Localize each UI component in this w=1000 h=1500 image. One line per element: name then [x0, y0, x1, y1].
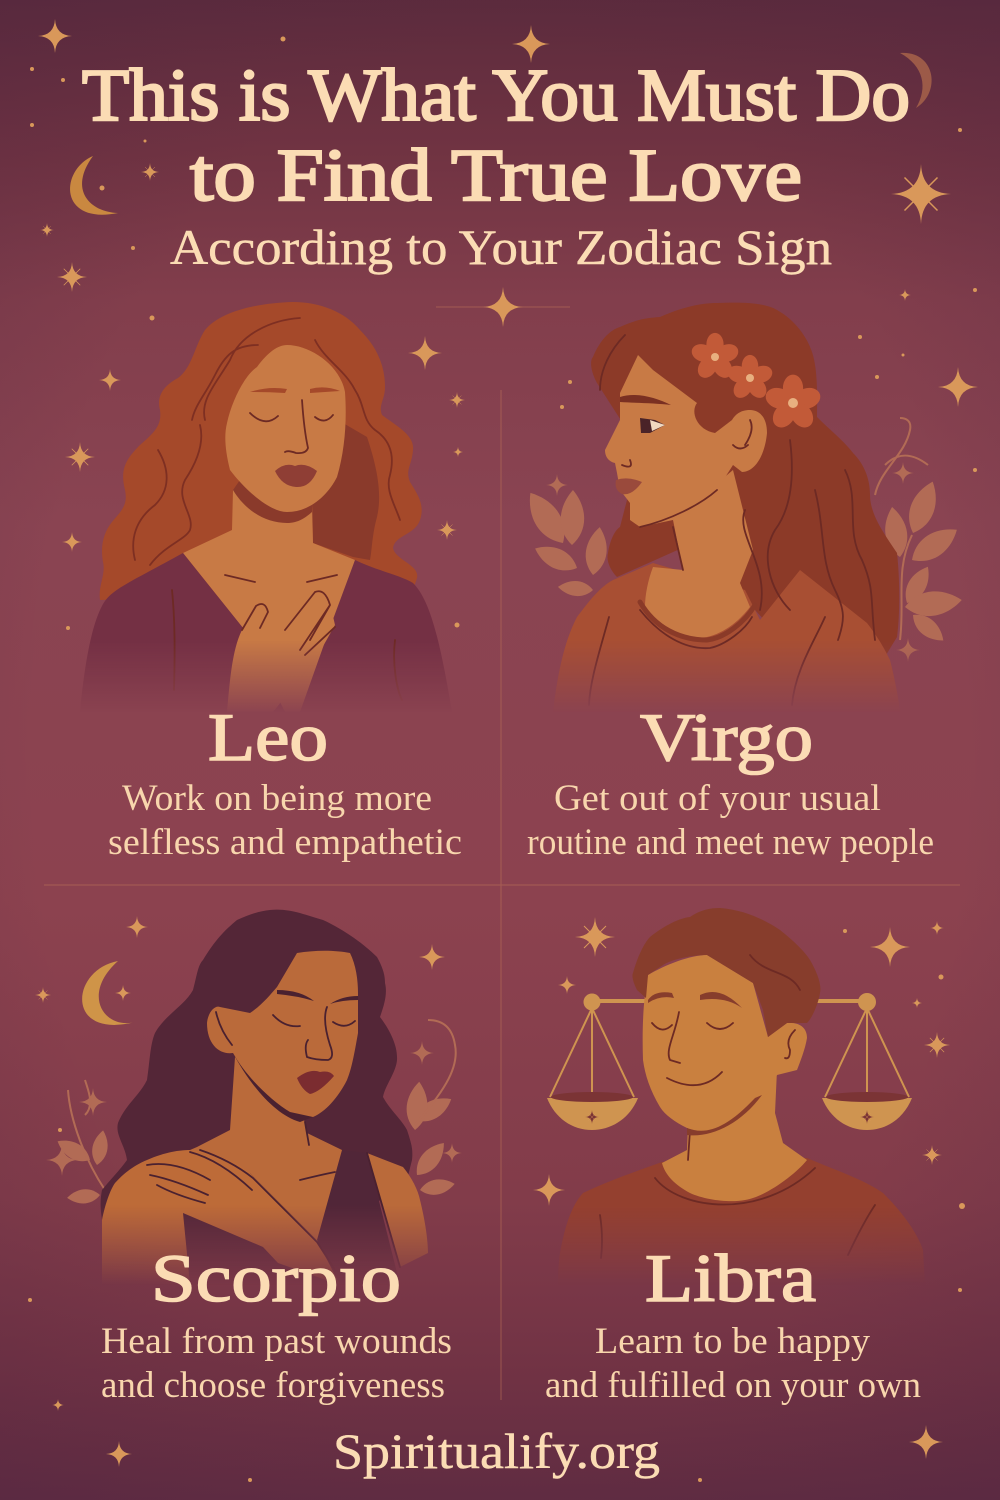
icon: crescent moon [82, 961, 135, 1025]
panel: Libra [545, 908, 925, 1406]
icon: crescent moon top right [900, 53, 932, 108]
text: Scorpio advice: and choose forgiveness [101, 1365, 445, 1406]
heading: Scorpio: Scorpio [151, 1240, 401, 1316]
panel: Scorpio [46, 910, 462, 1406]
text: Virgo advice: Get out of your usual [554, 778, 881, 819]
illustration: Libra man [558, 908, 925, 1285]
heading: Virgo: Virgo [640, 699, 813, 775]
text: Libra advice: Learn to be happy [595, 1321, 870, 1362]
text: Libra advice: and fulfilled on your own [545, 1365, 921, 1406]
panel: Virgo [520, 303, 963, 863]
footer: website: Spiritualify.org [333, 1423, 660, 1479]
title: to Find True Love [190, 135, 802, 217]
heading: Libra: Libra [645, 1240, 816, 1316]
text: Leo advice: selfless and empathetic [108, 822, 462, 863]
subtitle: According to Your Zodiac Sign [170, 219, 832, 275]
text: Libra advice [545, 1321, 921, 1406]
text: Leo advice: Work on being more [122, 778, 432, 819]
icon: crescent moon left [70, 156, 118, 215]
illustration: Leo woman [80, 302, 452, 712]
text: Scorpio advice [101, 1321, 452, 1406]
illustration: Virgo woman [520, 303, 963, 712]
title: This is What You Must Do [82, 55, 910, 137]
text: Virgo advice [527, 778, 934, 863]
heading: Leo: Leo [208, 699, 328, 775]
text: Leo advice [108, 778, 462, 863]
title [82, 55, 910, 217]
text: Scorpio advice: Heal from past wounds [101, 1321, 452, 1362]
illustration: Scorpio woman [46, 910, 462, 1285]
icon: libra scales [547, 993, 912, 1130]
divider lines [44, 307, 960, 1400]
panel: Leo [80, 302, 462, 863]
text: Virgo advice: routine and meet new people [527, 822, 934, 863]
